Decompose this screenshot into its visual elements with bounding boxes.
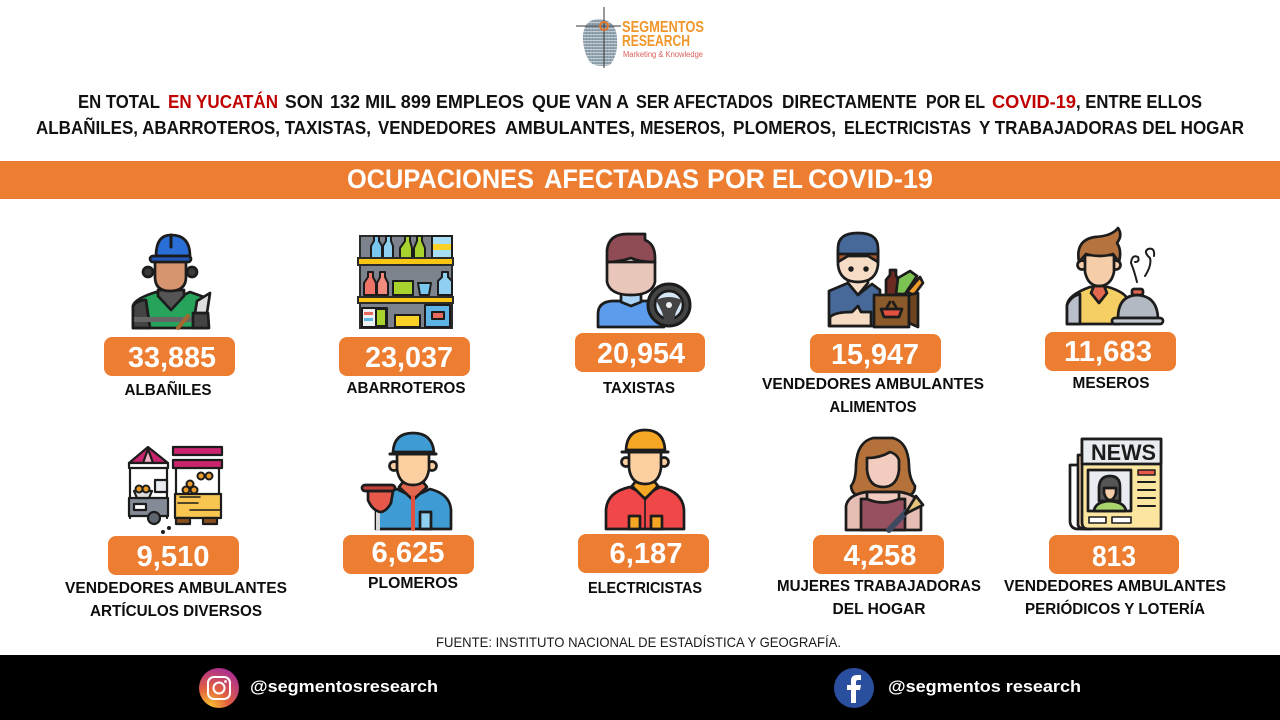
- intro text: SER AFECTADOS: [636, 92, 773, 112]
- label line 2: PERIÓDICOS Y LOTERÍA: [1025, 599, 1205, 618]
- value pill: [575, 333, 705, 372]
- label: TAXISTAS: [603, 380, 675, 397]
- label line 2: ALIMENTOS: [830, 399, 917, 416]
- value: 11,683: [1064, 336, 1152, 368]
- intro text: SON: [285, 92, 323, 112]
- value: 9,510: [136, 541, 210, 573]
- facebook handle: @segmentos research: [888, 677, 1081, 696]
- occupation: taxistas: [575, 234, 705, 397]
- value pill: [343, 535, 474, 574]
- value pill: [578, 534, 709, 573]
- label line 2: ARTÍCULOS DIVERSOS: [90, 601, 262, 620]
- occupation: vendedores ambulantes periódicos y lotería: [1004, 439, 1226, 618]
- intro text: PLOMEROS,: [733, 118, 836, 138]
- intro text: POR EL: [926, 92, 985, 112]
- value: 4,258: [844, 540, 916, 572]
- icon: instagram: [199, 668, 239, 708]
- intro text: [36, 91, 1244, 138]
- logo: Segmentos Research: SEGMENTOS: [622, 19, 704, 36]
- logo: Segmentos Research: [576, 7, 704, 68]
- title banner: OCUPACIONES: [347, 164, 534, 194]
- intro text: DIRECTAMENTE: [782, 92, 917, 112]
- label: MUJERES TRABAJADORAS: [777, 578, 981, 595]
- icon: newspaper: [1070, 439, 1161, 529]
- value pill: [810, 334, 941, 373]
- intro text: EN YUCATÁN: [168, 91, 278, 112]
- occupation: meseros: [1045, 228, 1176, 392]
- value pill: [813, 535, 944, 574]
- label: VENDEDORES AMBULANTES: [762, 376, 984, 393]
- occupation: albañiles: [104, 235, 235, 399]
- label: PLOMEROS: [368, 575, 458, 592]
- icon: housekeeper: [846, 438, 923, 530]
- value: 33,885: [128, 342, 216, 374]
- value: 15,947: [831, 339, 919, 371]
- value pill: [339, 337, 470, 376]
- title banner: POR: [707, 164, 765, 194]
- occupation: vendedores ambulantes artículos diversos: [65, 447, 287, 620]
- icon: street stalls: [129, 447, 222, 533]
- intro text: COVID-19: [992, 92, 1076, 112]
- intro text: ALBAÑILES, ABARROTEROS, TAXISTAS,: [36, 117, 371, 138]
- intro text: 132 MIL 899 EMPLEOS: [330, 92, 524, 112]
- icon: grocery shelves: [358, 236, 453, 328]
- icon: electrician: [606, 430, 684, 529]
- icon: food vendor: [829, 233, 923, 327]
- instagram handle: @segmentosresearch: [250, 677, 438, 696]
- intro text: QUE VAN A: [532, 92, 629, 112]
- icon: taxi driver: [598, 234, 690, 327]
- label: ABARROTEROS: [346, 380, 466, 397]
- value: 813: [1092, 541, 1136, 573]
- logo: Segmentos Research: RESEARCH: [622, 33, 690, 50]
- logo: Segmentos Research: Marketing & Knowledge: [623, 50, 704, 59]
- intro text: ELECTRICISTAS: [844, 118, 971, 138]
- label: VENDEDORES AMBULANTES: [65, 580, 287, 597]
- occupation: plomeros: [343, 433, 474, 592]
- value: 23,037: [365, 342, 453, 374]
- title banner: COVID-19: [808, 164, 933, 194]
- value pill: [108, 536, 239, 575]
- icon: facebook: [834, 668, 874, 708]
- value: 6,625: [372, 537, 444, 569]
- icon: construction worker: [133, 235, 210, 328]
- occupation: mujeres trabajadoras del hogar: [777, 438, 981, 618]
- label: ELECTRICISTAS: [588, 580, 702, 597]
- label: VENDEDORES AMBULANTES: [1004, 578, 1226, 595]
- occupation: electricistas: [578, 430, 709, 597]
- occupation: abarroteros: [339, 236, 470, 397]
- value: 6,187: [610, 538, 682, 570]
- value pill: [1045, 332, 1176, 371]
- value: 20,954: [597, 338, 685, 370]
- title banner: EL: [772, 164, 803, 194]
- label: MESEROS: [1072, 375, 1150, 392]
- intro text: VENDEDORES: [378, 118, 496, 138]
- label line 2: DEL HOGAR: [832, 601, 926, 618]
- intro text: , ENTRE ELLOS: [1076, 92, 1202, 112]
- title banner: [0, 161, 1280, 199]
- occupation: vendedores ambulantes alimentos: [762, 233, 984, 416]
- title banner: AFECTADAS: [544, 164, 699, 194]
- icon: waiter with cloche: [1067, 228, 1163, 324]
- value pill: [1049, 535, 1179, 574]
- source note: FUENTE: INSTITUTO NACIONAL DE ESTADÍSTICA Y GEOGRAFÍA.: [436, 634, 841, 650]
- icon: plumber: [362, 433, 451, 529]
- icon: newspaper: NEWS: [1091, 440, 1156, 465]
- footer bar: [0, 655, 1280, 720]
- intro text: Y TRABAJADORAS DEL HOGAR: [979, 118, 1244, 138]
- label: ALBAÑILES: [124, 379, 212, 399]
- value pill: [104, 337, 235, 376]
- intro text: AMBULANTES,: [505, 118, 635, 138]
- intro text: MESEROS,: [640, 118, 725, 138]
- intro text: EN TOTAL: [78, 92, 160, 112]
